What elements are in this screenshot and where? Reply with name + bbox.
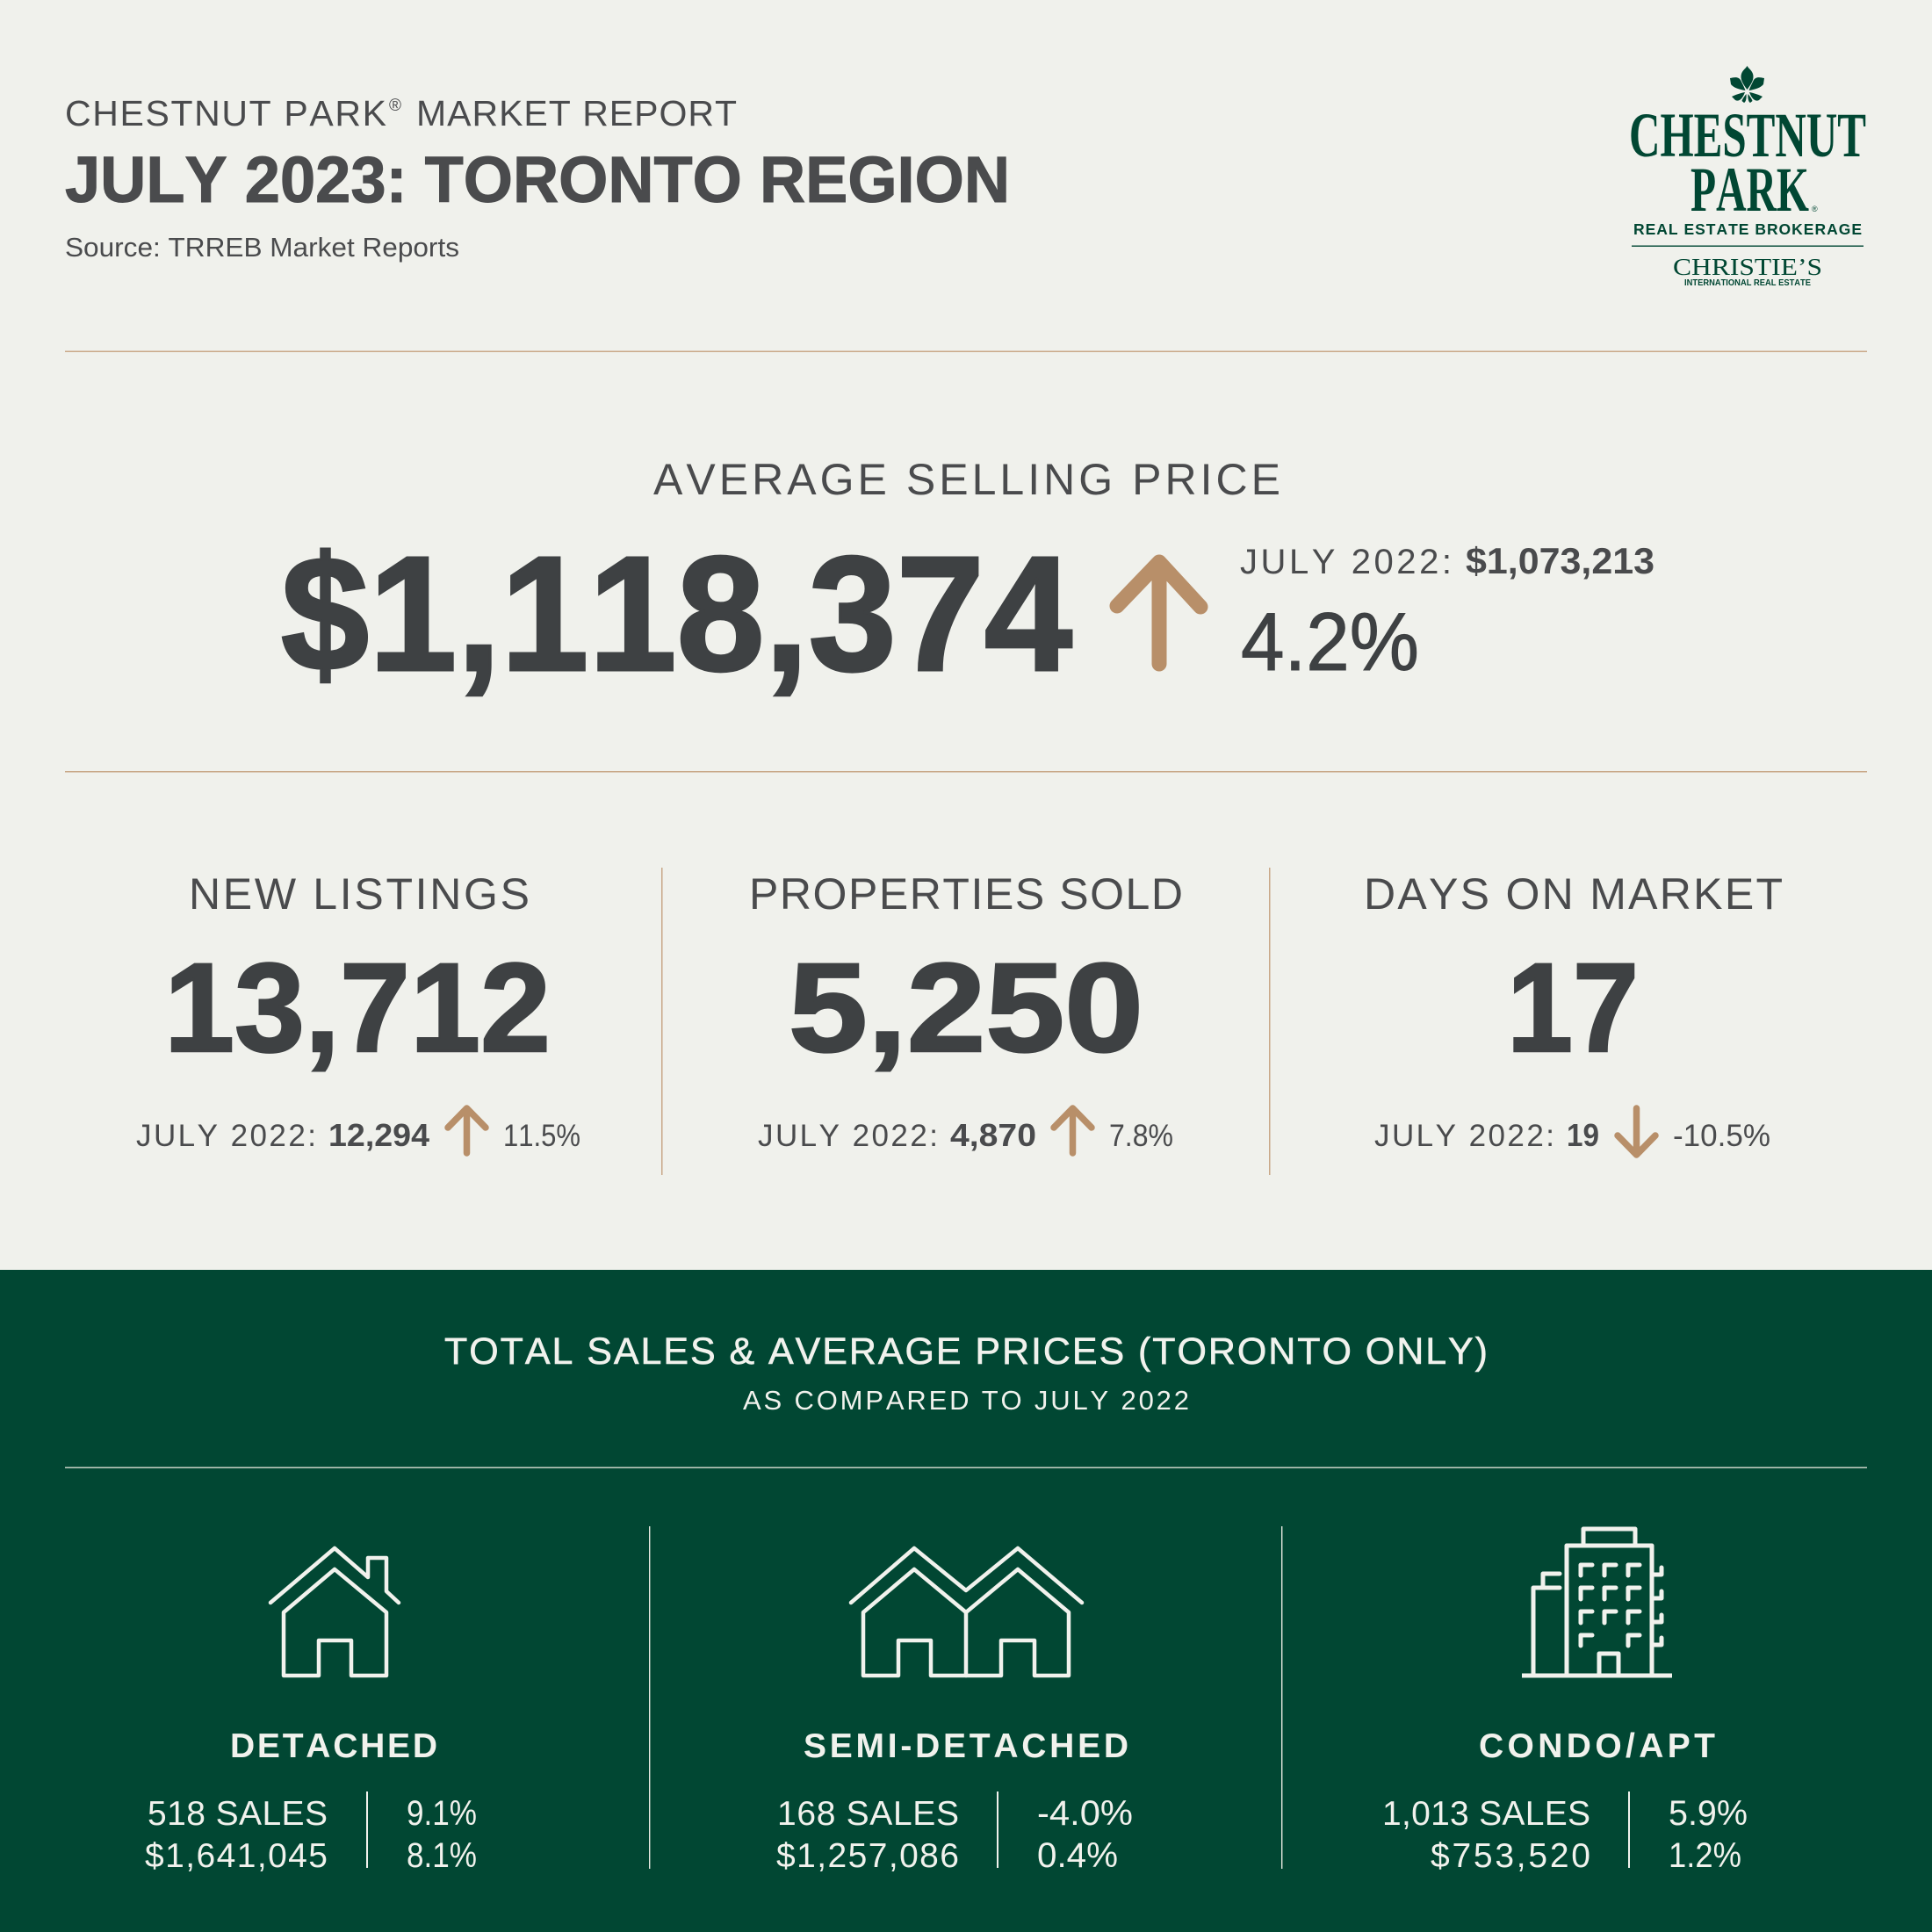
logo: INTERNATIONAL REAL ESTATE xyxy=(1684,278,1811,288)
panel: average selling price xyxy=(281,455,1654,705)
percentage: 7.8% xyxy=(1109,1119,1173,1153)
price: $1,118,374 xyxy=(281,523,1072,705)
report eyebrow: ® xyxy=(389,97,401,115)
logo: ® xyxy=(1812,205,1818,213)
comparison: JULY 2022: xyxy=(1240,543,1452,581)
label: DETACHED xyxy=(230,1727,437,1765)
icon: house xyxy=(270,1548,399,1676)
value: 5,250 xyxy=(789,937,1143,1078)
report eyebrow: CHESTNUT PARK xyxy=(65,93,386,133)
label: DAYS ON MARKET xyxy=(1364,869,1783,919)
comparison: $1,073,213 xyxy=(1466,540,1654,581)
comparison: JULY 2022: xyxy=(136,1119,316,1153)
report eyebrow xyxy=(65,93,737,133)
christie's mark: CHRISTIE’S xyxy=(1673,254,1822,280)
value: 17 xyxy=(1507,937,1639,1078)
arrow up xyxy=(448,1108,486,1153)
sales xyxy=(776,1795,959,1875)
panel: days on market xyxy=(1364,869,1783,1155)
changes: 1.2% xyxy=(1669,1836,1741,1875)
percentage: 4.2% xyxy=(1241,595,1419,688)
changes: 5.9% xyxy=(1669,1794,1748,1833)
sales xyxy=(145,1795,328,1875)
icon: chestnut leaf xyxy=(1730,66,1764,103)
panel: properties sold xyxy=(749,869,1183,1153)
sales xyxy=(1382,1795,1590,1875)
sales: 168 SALES xyxy=(777,1795,959,1833)
panel: green section xyxy=(0,1270,1932,1932)
sales: $1,257,086 xyxy=(776,1837,959,1875)
changes: -4.0% xyxy=(1037,1794,1133,1833)
panel: detached xyxy=(145,1548,477,1875)
changes: 9.1% xyxy=(407,1794,477,1833)
comparison xyxy=(758,1117,1036,1153)
sales: $753,520 xyxy=(1431,1837,1590,1875)
comparison: JULY 2022: xyxy=(1374,1119,1554,1153)
label: NEW LISTINGS xyxy=(189,869,530,919)
panel: new listings xyxy=(136,869,580,1153)
logo xyxy=(1629,66,1866,288)
report eyebrow: MARKET REPORT xyxy=(416,93,737,133)
sales: $1,641,045 xyxy=(145,1837,328,1875)
sales: 518 SALES xyxy=(148,1795,328,1833)
icon: condo tower xyxy=(1522,1529,1672,1676)
panel: condo xyxy=(1382,1529,1748,1875)
comparison: JULY 2022: xyxy=(758,1119,938,1153)
changes: 8.1% xyxy=(407,1836,477,1875)
logo: PARK xyxy=(1690,155,1809,225)
comparison: 12,294 xyxy=(328,1117,429,1153)
value: 13,712 xyxy=(164,937,551,1078)
header xyxy=(65,93,1010,263)
comparison xyxy=(1240,540,1654,581)
comparison: 4,870 xyxy=(950,1117,1036,1153)
changes xyxy=(1669,1794,1748,1875)
label: PROPERTIES SOLD xyxy=(749,869,1183,919)
title: JULY 2023: TORONTO REGION xyxy=(65,143,1010,216)
arrow up xyxy=(1054,1108,1092,1153)
comparison xyxy=(136,1117,429,1153)
source: Source: TRREB Market Reports xyxy=(65,232,459,263)
logo tagline: REAL ESTATE BROKERAGE xyxy=(1633,220,1862,238)
section heading: TOTAL SALES & AVERAGE PRICES (TORONTO ONLY) xyxy=(444,1330,1488,1373)
changes xyxy=(407,1794,477,1875)
changes: 0.4% xyxy=(1037,1836,1118,1875)
percentage: -10.5% xyxy=(1673,1119,1770,1153)
sales: 1,013 SALES xyxy=(1382,1795,1590,1833)
percentage: 11.5% xyxy=(503,1119,580,1153)
icon: semi-detached houses xyxy=(851,1548,1082,1676)
heading: AVERAGE SELLING PRICE xyxy=(653,455,1280,504)
arrow down xyxy=(1618,1108,1655,1155)
comparison: 19 xyxy=(1567,1117,1599,1153)
panel: semi-detached xyxy=(776,1548,1133,1875)
arrow up xyxy=(1117,562,1200,664)
label: CONDO/APT xyxy=(1479,1727,1715,1765)
changes xyxy=(1037,1794,1133,1875)
label: SEMI-DETACHED xyxy=(804,1727,1128,1765)
section subheading: AS COMPARED TO JULY 2022 xyxy=(743,1385,1189,1416)
